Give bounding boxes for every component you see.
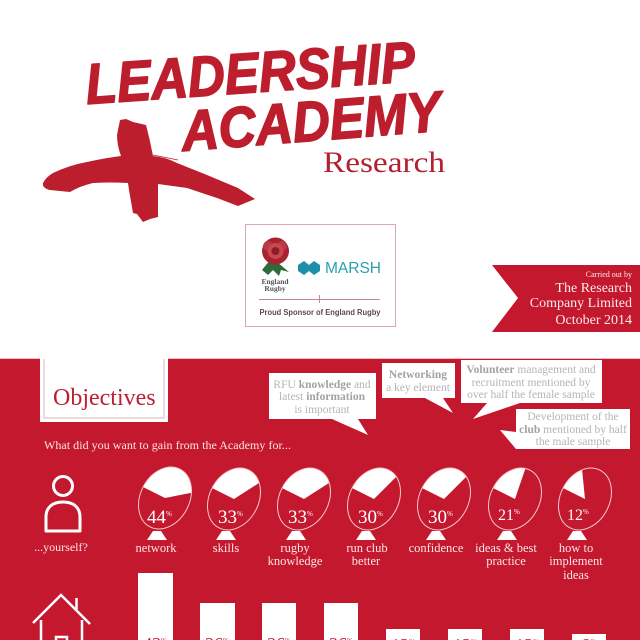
- callout: Networking: a key element: [386, 382, 451, 394]
- chart: network 44%: 44: [147, 507, 166, 528]
- chart: ideas and best practice 21%: [475, 468, 542, 568]
- chart: confidence 30%: [409, 468, 471, 552]
- bar chart: club objectives: [138, 573, 606, 640]
- question text: What did you want to gain from the Academy for...: [44, 438, 291, 452]
- chart: run club better 30%: 30: [358, 507, 377, 528]
- chart: how to implement ideas 12%: implement: [549, 554, 603, 568]
- callout: Networking: [382, 363, 455, 413]
- callout: RFU knowledge: is important: [294, 404, 350, 416]
- callout: RFU knowledge: [269, 373, 376, 435]
- ribbon: carried out by: The Research: [555, 281, 632, 296]
- chart: run club better 30%: [346, 468, 401, 565]
- chart: rugby knowledge 33%: [268, 468, 331, 568]
- icon: Marsh: [298, 261, 320, 275]
- chart: network 44%: network: [136, 541, 177, 555]
- chart: how to implement ideas 12%: ideas: [563, 568, 589, 582]
- icon: brush-stroke cross: [43, 119, 255, 222]
- callout: RFU knowledge: latest information: [279, 391, 365, 403]
- sponsor caption: Proud Sponsor of England Rugby: [260, 308, 381, 317]
- chart: run club better 30%: run club: [346, 541, 388, 555]
- chart: rugby knowledge 33%: 33: [288, 507, 307, 528]
- icon: person: [46, 476, 80, 531]
- chart: ideas and best practice 21%: 21: [498, 507, 514, 524]
- chart: how to implement ideas 12%: [550, 468, 612, 579]
- chart: how to implement ideas 12%: %: [583, 508, 589, 516]
- heading tab: Objectives: [40, 358, 168, 422]
- chart: run club better 30%: %: [377, 510, 383, 518]
- chart: rugby knowledge 33%: knowledge: [268, 554, 323, 568]
- ribbon: carried out by: October 2014: [555, 313, 632, 328]
- callout: RFU knowledge: RFU knowledge and: [273, 379, 371, 391]
- England Rugby wordmark: England: [261, 277, 289, 286]
- ribbon: carried out by: Carried out by: [586, 270, 632, 279]
- chart: confidence 30%: 30: [428, 507, 447, 528]
- callout: club development: Development of the: [527, 411, 619, 423]
- label: yourself: ...yourself?: [34, 540, 88, 554]
- chart: skills 33%: [207, 468, 261, 552]
- chart: skills 33%: skills: [213, 541, 239, 555]
- callout: Volunteer: [461, 360, 602, 419]
- chart: rugby knowledge 33%: %: [307, 510, 313, 518]
- logo word: Academy: ACADEMY: [177, 79, 448, 164]
- icon: house: [33, 595, 90, 640]
- chart: confidence 30%: %: [447, 510, 453, 518]
- ribbon: carried out by: Company Limited: [530, 296, 632, 311]
- chart: run club better 30%: better: [352, 554, 381, 568]
- chart: ideas and best practice 21%: ideas & best: [475, 541, 537, 555]
- chart: skills 33%: %: [237, 510, 243, 518]
- England Rugby wordmark: Rugby: [264, 284, 286, 293]
- callout: Volunteer: over half the female sample: [467, 389, 595, 401]
- logo word: Research: Research: [323, 146, 445, 179]
- callout: Volunteer: Volunteer management and: [466, 364, 596, 376]
- heading tab: Objectives: Objectives: [53, 385, 156, 411]
- chart: skills 33%: 33: [218, 507, 237, 528]
- callout: club development: club mentioned by half: [519, 424, 627, 436]
- chart: ideas and best practice 21%: practice: [486, 554, 526, 568]
- chart: how to implement ideas 12%: how to: [559, 541, 593, 555]
- Marsh wordmark: MARSH: [325, 260, 381, 277]
- chart: rugby knowledge 33%: rugby: [280, 541, 310, 555]
- chart: ideas and best practice 21%: %: [514, 508, 520, 516]
- chart: network 44%: %: [166, 510, 172, 518]
- callout: club development: the male sample: [536, 436, 610, 448]
- sponsor box: [246, 224, 396, 326]
- logo word: Leadership: LEADERSHIP: [83, 30, 418, 117]
- logo: Leadership Academy: [43, 30, 448, 222]
- chart: confidence 30%: confidence: [409, 541, 464, 555]
- chart: network 44%: [136, 466, 192, 552]
- chart: how to implement ideas 12%: 12: [567, 507, 583, 524]
- panel: objectives: [0, 358, 640, 640]
- icon: England rose: [262, 238, 289, 276]
- ribbon: carried out by: [492, 265, 640, 332]
- callout: club development: [500, 409, 630, 449]
- callout: Networking: Networking: [389, 369, 447, 381]
- callout: Volunteer: recruitment mentioned by: [472, 377, 591, 389]
